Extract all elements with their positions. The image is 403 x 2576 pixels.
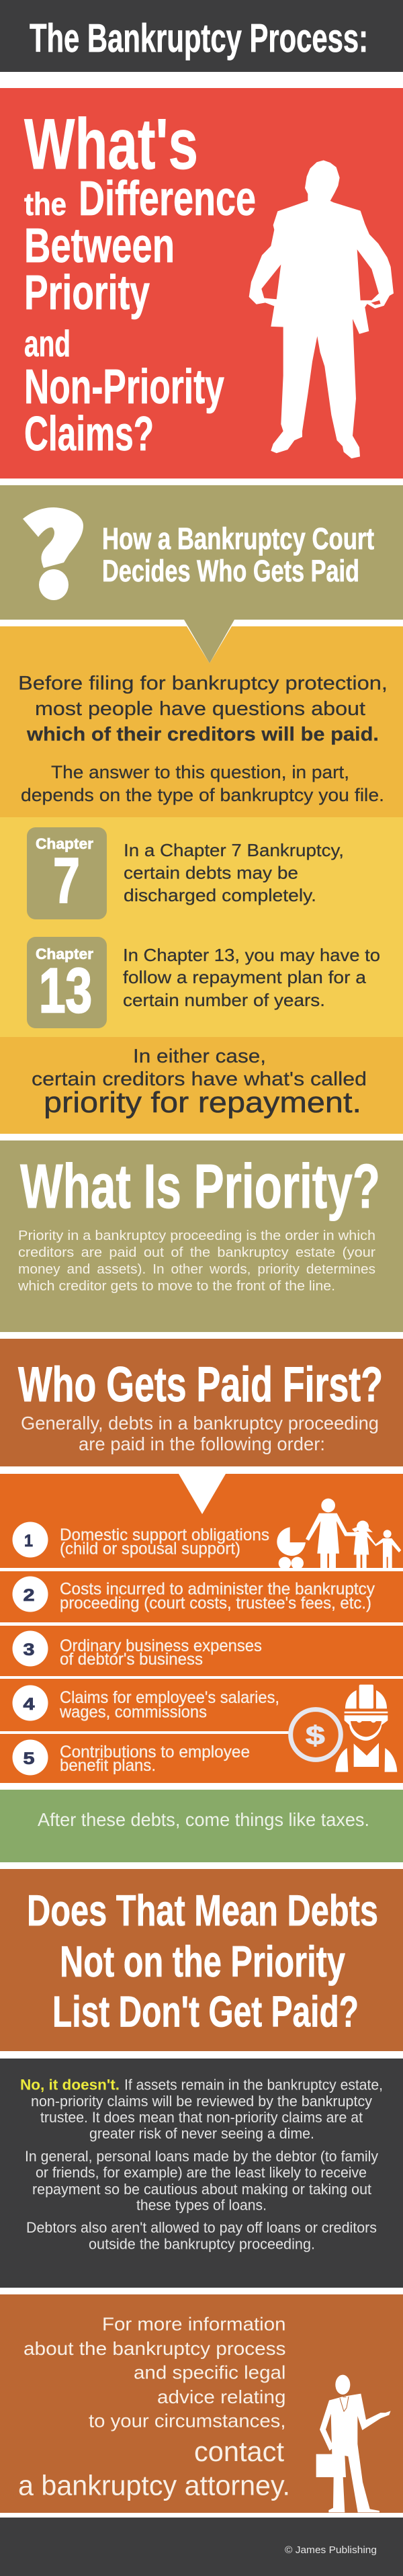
list item 1 (12, 1522, 269, 1558)
list item 4: 4 (23, 1695, 35, 1714)
intro paragraph: which of their creditors will be paid. (26, 724, 379, 745)
badge: chapter 7: 7 (53, 845, 80, 917)
call to action text: and specific legal (134, 2362, 286, 2383)
panel: does that mean question (0, 1869, 403, 2051)
badge: chapter 13: 13 (39, 955, 92, 1026)
answer paragraph 3: outside the bankruptcy proceeding. (89, 2235, 315, 2253)
list item 2: Costs incurred to administer the bankruptcy (60, 1579, 375, 1598)
main heading (24, 103, 256, 461)
list item 5: 5 (23, 1749, 35, 1768)
answer paragraph 1: If assets remain in the bankruptcy estate, (124, 2077, 383, 2093)
answer paragraph 2: repayment so be cautious about making or taking out (32, 2181, 371, 2198)
badge: chapter 7: Chapter (36, 835, 93, 852)
panel: footer (0, 2518, 403, 2576)
answer paragraph 2: In general, personal loans made by the debtor (to family (25, 2148, 378, 2165)
subheading: are paid in the following order: (79, 1434, 325, 1454)
list item 3: of debtor's business (60, 1650, 203, 1669)
panel: taxes note (0, 1790, 403, 1862)
panel: call to action (0, 2294, 403, 2513)
panel: what is priority (0, 1140, 403, 1332)
taxes text: After these debts, come things like taxes. (38, 1809, 369, 1830)
icon: family with stroller (277, 1499, 401, 1569)
definition text: money and assets). In other words, priority determines (18, 1262, 375, 1277)
definition text: creditors are paid out of the bankruptcy estate (your (18, 1245, 375, 1260)
list item 4: wages, commissions (59, 1703, 207, 1722)
badge: chapter 7 (27, 827, 107, 919)
subheading: Generally, debts in a bankruptcy proceeding (21, 1413, 379, 1434)
intro paragraph (18, 673, 388, 745)
panel: priority list (0, 1474, 403, 1783)
call to action text (18, 2313, 290, 2501)
call to action text: contact (194, 2436, 284, 2467)
answer paragraph 1 (20, 2077, 383, 2142)
list item 3 (12, 1630, 262, 1669)
list item 1: Domestic support obligations (60, 1526, 269, 1544)
main heading: Claims? (24, 407, 154, 461)
answer paragraph: The answer to this question, in part, (51, 762, 349, 782)
panel: priority for repayment (0, 1037, 403, 1134)
list item 5: Contributions to employee (60, 1743, 250, 1761)
chapter 13 text (123, 945, 380, 1010)
panel: intro text on amber (0, 626, 403, 817)
call to action text: a bankruptcy attorney. (18, 2469, 290, 2501)
list item 5: benefit plans. (60, 1756, 156, 1775)
list item 5 (12, 1739, 250, 1776)
list item 1: (child or spousal support) (60, 1539, 240, 1558)
panel: answer (0, 2059, 403, 2288)
panel: top title bar (0, 0, 403, 72)
call to action text: about the bankruptcy process (24, 2338, 286, 2359)
call to action text: For more information (102, 2313, 286, 2335)
icon: worker and dollar coin (291, 1685, 397, 1772)
answer paragraph 1: greater risk of never seeing a dime. (89, 2125, 314, 2142)
list item 2: proceeding (court costs, trustee's fees, etc.) (60, 1594, 371, 1613)
chapter 13 text: follow a repayment plan for a (123, 967, 367, 987)
answer paragraph 1: non-priority claims will be reviewed by the bankruptcy (31, 2093, 372, 2110)
list item 2: 2 (23, 1586, 35, 1605)
copyright: © James Publishing (285, 2544, 377, 2556)
section heading (102, 522, 374, 588)
icon: question mark (23, 507, 83, 600)
panel: how a bankruptcy court decides (0, 485, 403, 663)
answer paragraph 1: trustee. It does mean that non-priority claims are at (40, 2109, 363, 2126)
priority statement: priority for repayment. (44, 1086, 361, 1119)
intro paragraph: Before filing for bankruptcy protection, (18, 673, 388, 694)
main heading: Between (24, 219, 175, 273)
main heading: Difference (79, 172, 256, 226)
definition text: which creditor gets to move to the front of the line. (17, 1279, 335, 1294)
chapter 13 text: certain number of years. (123, 990, 325, 1010)
main heading: Non-Priority (24, 360, 224, 414)
answer paragraph 3 (26, 2219, 377, 2253)
main heading: What's (24, 103, 198, 184)
answer paragraph: depends on the type of bankruptcy you file. (21, 785, 384, 805)
answer paragraph (21, 762, 384, 805)
icon: attorney with briefcase (316, 2375, 391, 2512)
icon: man with empty pockets silhouette (249, 161, 394, 458)
list item 2 (12, 1577, 375, 1613)
main heading: the (24, 186, 66, 222)
panel: chapter comparison (0, 817, 403, 1037)
chapter 7 text: discharged completely. (124, 885, 316, 905)
badge: chapter 13: Chapter (36, 946, 93, 962)
panel: who gets paid first (0, 1339, 403, 1466)
call to action text: advice relating (157, 2386, 286, 2407)
priority statement (32, 1046, 367, 1119)
badge: chapter 13 (27, 937, 107, 1028)
definition text: Priority in a bankruptcy proceeding is the order in which (18, 1229, 375, 1243)
definition text (17, 1229, 375, 1294)
answer paragraph 2: or friends, for example) are the least likely to receive (36, 2164, 367, 2181)
chapter 13 text: In Chapter 13, you may have to (123, 945, 380, 965)
list item 3: 3 (23, 1640, 35, 1659)
main heading: Priority (24, 266, 150, 320)
call to action text: to your circumstances, (89, 2410, 286, 2432)
answer paragraph 2 (25, 2148, 378, 2214)
list item 4 (12, 1686, 279, 1722)
chapter 7 text (124, 840, 344, 905)
intro paragraph: most people have questions about (35, 698, 365, 720)
list item 4: Claims for employee's salaries, (60, 1688, 279, 1707)
subheading (21, 1413, 379, 1454)
chapter 7 text: In a Chapter 7 Bankruptcy, (124, 840, 344, 860)
main heading: and (24, 323, 71, 364)
answer paragraph 1: No, it doesn't. (20, 2077, 120, 2093)
list item 3: Ordinary business expenses (60, 1636, 262, 1655)
priority statement: certain creditors have what's called (32, 1069, 367, 1090)
icon: worker and dollar coin: $ (306, 1721, 325, 1751)
chapter 7 text: certain debts may be (124, 863, 298, 883)
answer paragraph 3: Debtors also aren't allowed to pay off loans or creditors (26, 2219, 377, 2236)
section heading (27, 1886, 378, 2036)
priority statement: In either case, (133, 1046, 266, 1067)
list item 1: 1 (24, 1532, 33, 1550)
panel: main heading on red (0, 88, 403, 479)
answer paragraph 2: these types of loans. (136, 2196, 267, 2214)
